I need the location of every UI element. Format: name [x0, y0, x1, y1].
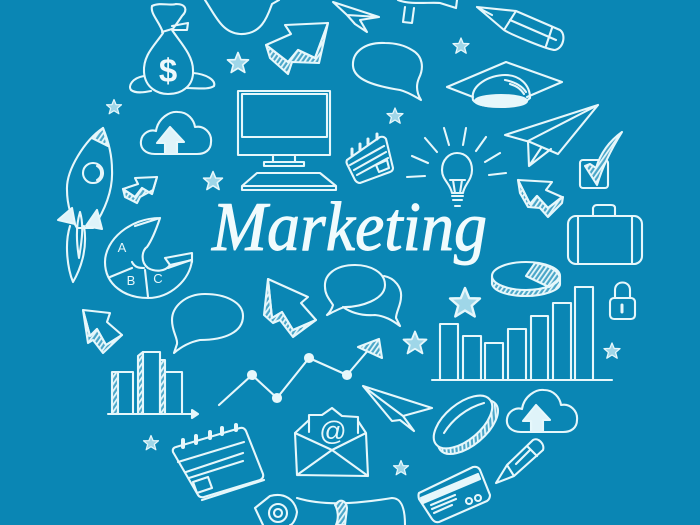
bar chart right	[432, 287, 612, 380]
left 3D arrow	[83, 310, 122, 353]
icon: paper plane top	[333, 2, 379, 32]
cursor arrow right	[518, 180, 563, 217]
icon: email envelope	[295, 408, 368, 476]
icon: megaphone	[398, 0, 457, 23]
icon: coin	[425, 386, 507, 464]
icon: padlock	[610, 282, 635, 319]
bar chart left	[108, 352, 198, 418]
icon: money bag: $	[159, 52, 177, 89]
pie chart with letters	[105, 218, 192, 298]
icon: 3D pie chart	[492, 262, 560, 296]
small calendar	[346, 134, 393, 183]
icon: cloud upload	[141, 112, 211, 154]
stars	[106, 38, 620, 475]
paper plane lower	[363, 386, 432, 431]
pie chart with letters: C	[153, 271, 163, 286]
double speech bubbles	[325, 265, 401, 326]
icon: megaphone handle curve	[205, 0, 279, 34]
speech bubble top	[353, 43, 422, 100]
icon: money bag	[130, 4, 214, 94]
pencil lower	[496, 439, 543, 483]
icon: 3D arrow top	[266, 23, 328, 74]
icon: email envelope: @	[319, 416, 347, 446]
speech bubble left	[172, 294, 243, 353]
icon: rocket	[58, 128, 112, 282]
title: Marketing	[211, 189, 487, 266]
icon: computer monitor	[238, 91, 336, 190]
icon: graduation cap	[447, 62, 562, 107]
center 3D arrow	[264, 279, 316, 337]
icon: suitcase	[568, 205, 642, 264]
icon: pencil	[477, 7, 563, 50]
line chart with arrow	[219, 339, 382, 405]
big calendar	[173, 425, 264, 500]
small arrow	[123, 177, 157, 203]
ribbon banner	[255, 495, 405, 525]
icon: light bulb	[407, 128, 506, 206]
icon: paper plane right	[505, 105, 598, 166]
cloud upload lower	[507, 390, 577, 432]
icon: checkbox	[580, 132, 622, 188]
credit card	[418, 467, 490, 522]
pie chart with letters: A	[118, 240, 127, 255]
pie chart with letters: B	[127, 273, 135, 288]
